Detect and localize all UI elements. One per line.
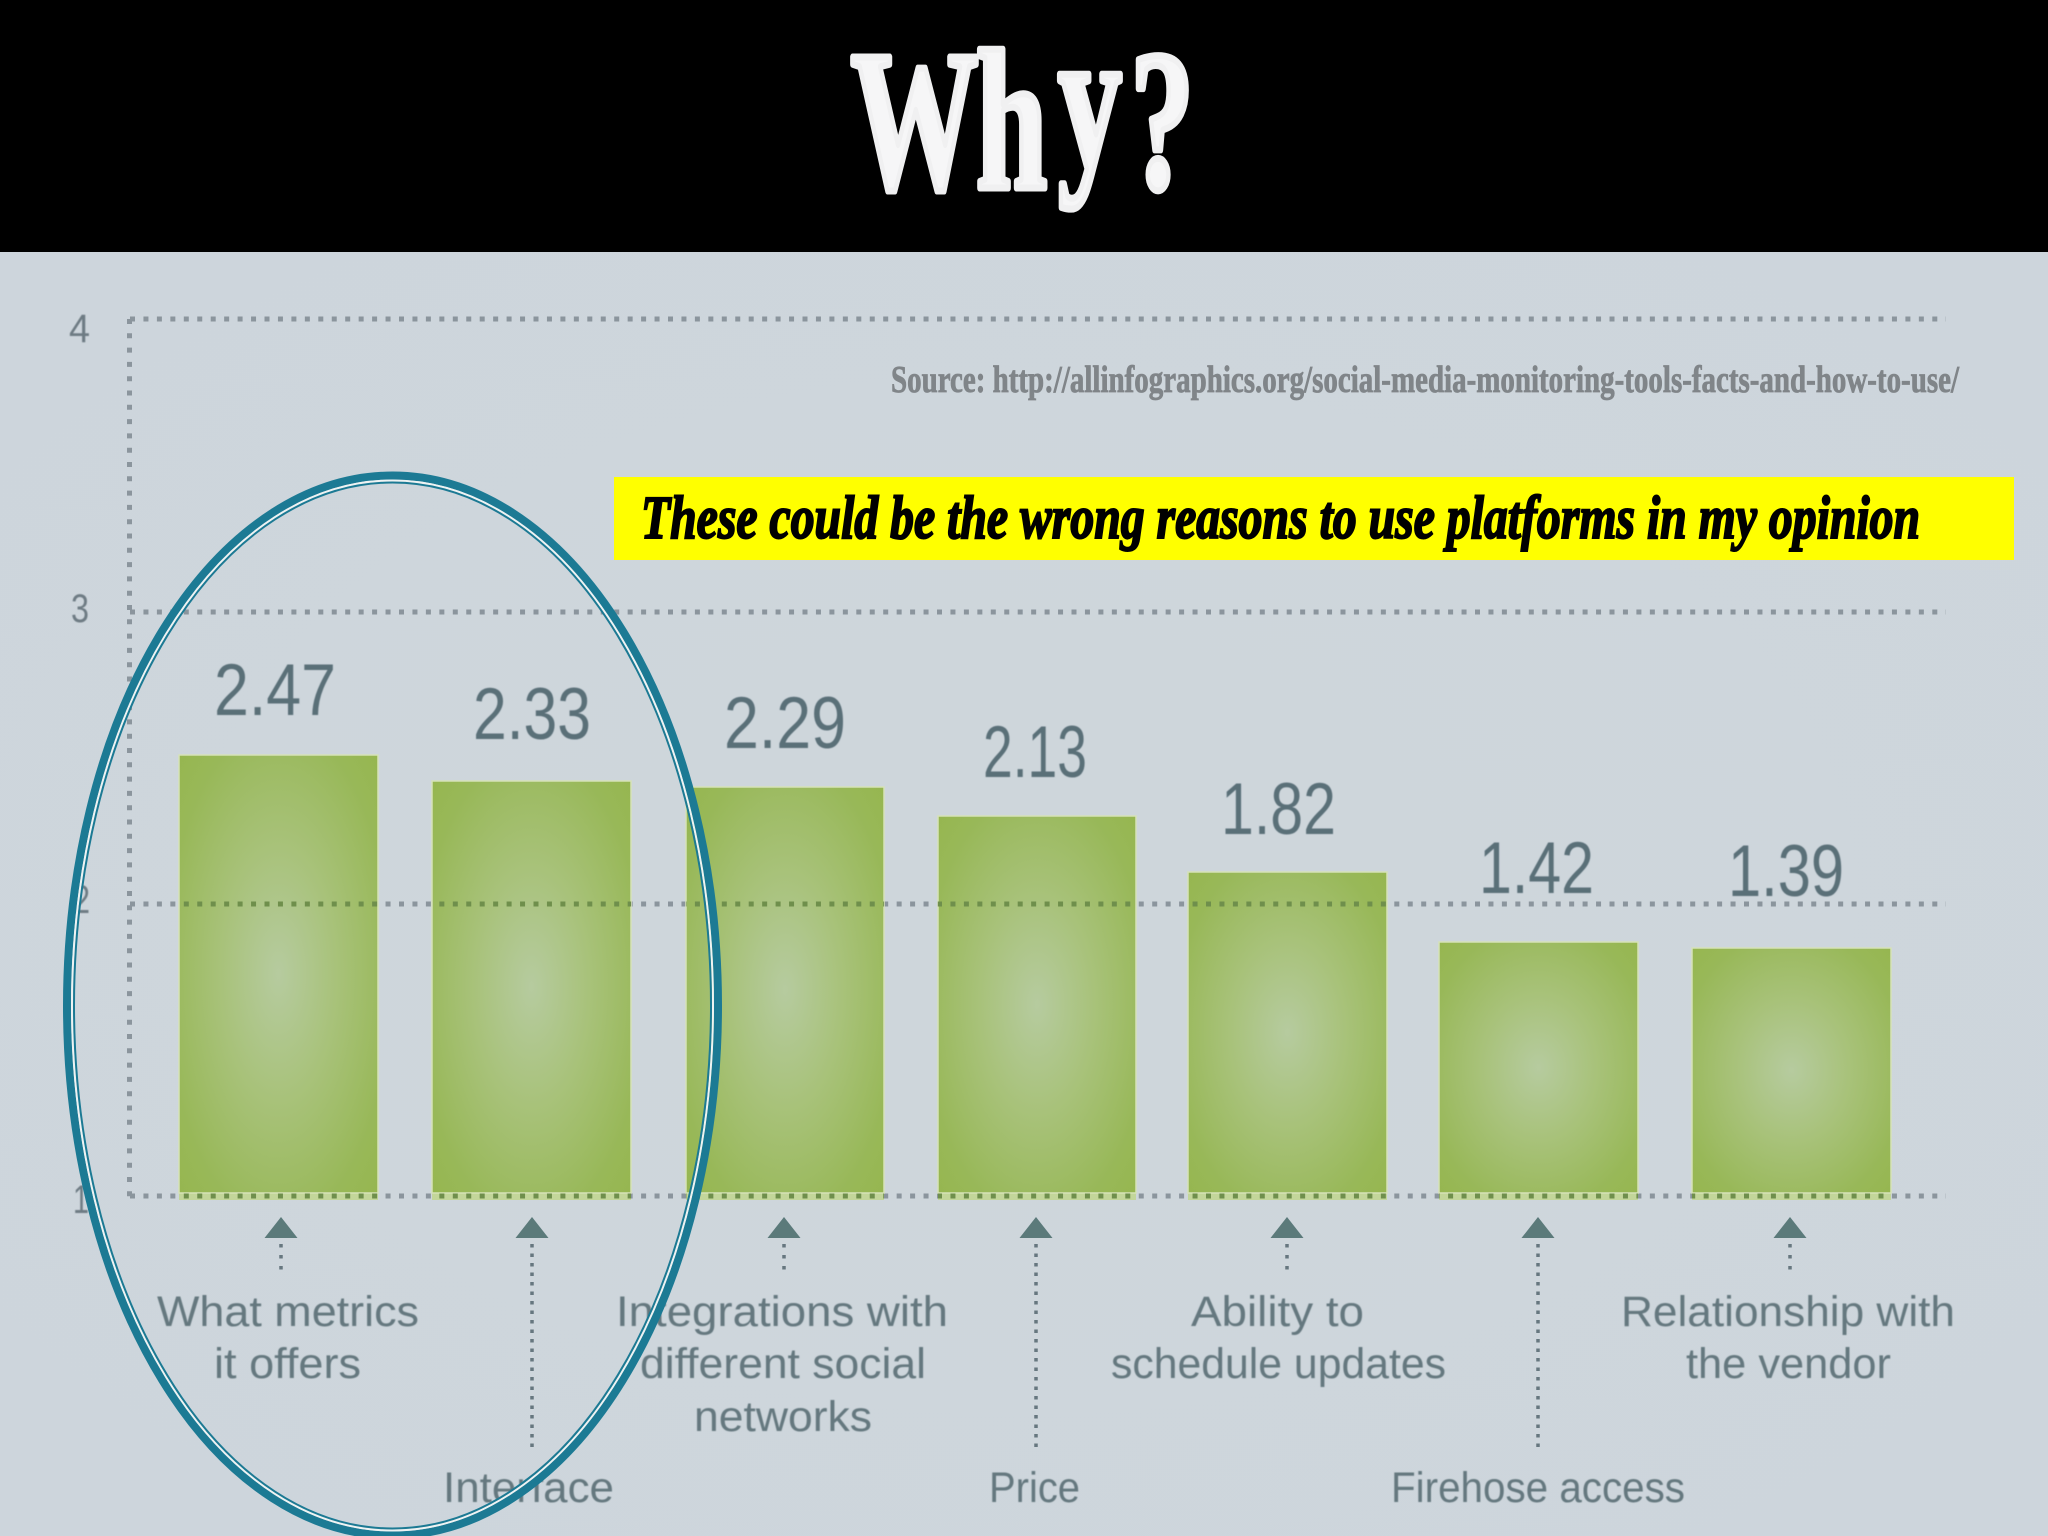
label: Interface: Interface xyxy=(443,1464,614,1512)
bar value labels: 1.39 xyxy=(1728,831,1844,912)
y axis labels xyxy=(69,307,90,1222)
y axis labels: 3 xyxy=(71,587,89,631)
bar: Integrations xyxy=(686,787,884,1193)
label: Relationship with the vendor: the vendor xyxy=(1686,1340,1891,1388)
bar: Firehose access xyxy=(1439,942,1638,1193)
bar: Relationship with the vendor xyxy=(1692,948,1891,1193)
label: Integrations with different social networks: networks xyxy=(694,1393,872,1441)
bar: What metrics it offers xyxy=(179,755,378,1193)
label: What metrics it offers xyxy=(157,1288,419,1388)
label: What metrics it offers: it offers xyxy=(214,1340,361,1388)
label: Ability to schedule updates: Ability to xyxy=(1191,1288,1364,1336)
y axis labels: 4 xyxy=(69,307,90,351)
label: Integrations with different social networks: Integrations with xyxy=(616,1288,948,1336)
label: Relationship with the vendor: Relationship with xyxy=(1621,1288,1955,1336)
y axis labels: 1 xyxy=(73,1178,89,1222)
bar value labels: 2.47 xyxy=(214,650,336,731)
label: Price: Price xyxy=(989,1464,1080,1512)
label: What metrics it offers: What metrics xyxy=(157,1288,419,1336)
bar: Ability to schedule updates xyxy=(1188,872,1387,1193)
gridline dots over bars xyxy=(130,904,1946,1196)
label: Ability to schedule updates xyxy=(1111,1288,1446,1388)
bar: Price xyxy=(938,816,1136,1193)
bar value labels: 1.42 xyxy=(1479,828,1594,909)
baseline highlight xyxy=(179,1192,378,1200)
bar value labels: 2.33 xyxy=(473,674,591,755)
y axis labels: 2 xyxy=(73,878,90,922)
bar value labels: 1.82 xyxy=(1221,769,1336,850)
bar value labels: 2.13 xyxy=(983,712,1087,793)
bar value labels xyxy=(214,650,1844,912)
highlight ellipse around first two bars xyxy=(67,476,718,1536)
category labels xyxy=(157,1288,1955,1512)
bar: Interface xyxy=(432,781,631,1193)
bar value labels: 2.29 xyxy=(724,683,846,764)
bar chart xyxy=(179,755,1891,1200)
label: Integrations with different social networks xyxy=(616,1288,948,1441)
label: Ability to schedule updates: schedule updates xyxy=(1111,1340,1446,1388)
label: Relationship with the vendor xyxy=(1621,1288,1955,1388)
label: Integrations with different social networks: different social xyxy=(640,1340,926,1388)
label: Firehose access: Firehose access xyxy=(1391,1464,1685,1512)
arrows from labels to bars xyxy=(264,1217,1806,1447)
chart gridlines and y axis xyxy=(130,319,1946,1198)
title band xyxy=(0,0,2048,252)
